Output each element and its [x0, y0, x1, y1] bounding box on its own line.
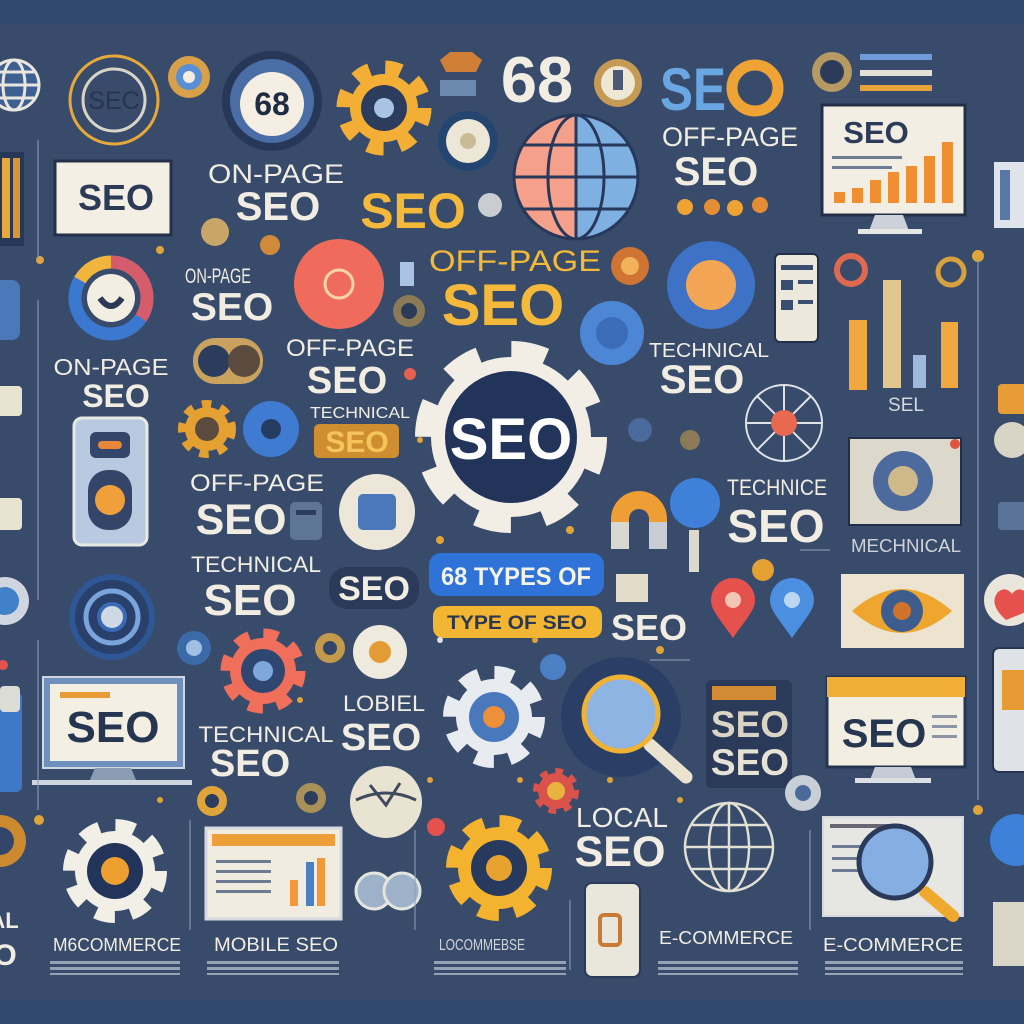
icon: blue orange disc — [667, 241, 755, 329]
panel: SEO SEO stacked — [706, 680, 792, 788]
left edge partial text — [0, 908, 19, 972]
icon: coral ring right — [837, 256, 964, 285]
panel: photo card right — [849, 438, 961, 525]
heading: Technical SEO far right — [727, 475, 827, 552]
panel: search browser — [823, 817, 963, 916]
heading: Lobiel SEO — [341, 691, 425, 759]
heading: Local SEO: LOCAL — [576, 802, 668, 833]
icon: blue hexagon — [243, 401, 299, 457]
icon: top browser ornament — [440, 52, 482, 96]
heading: Technical SEO right: SEO — [660, 358, 744, 402]
panel: browser chart — [206, 828, 341, 919]
icon: glasses — [356, 873, 420, 909]
label: M6commerce — [50, 935, 181, 975]
heading: Technical SEO far right: TECHNICE — [727, 475, 827, 500]
heading: Technical small — [310, 405, 410, 459]
right edge blue circle — [990, 814, 1024, 966]
heading: yellow SEO: SEO — [360, 183, 466, 239]
thin connector lines — [38, 140, 978, 970]
heading: Technical left: SEO — [204, 576, 296, 625]
heading: SEO top — [660, 56, 778, 123]
icon: small hydrant — [393, 262, 425, 327]
icon: red small gear — [538, 773, 574, 809]
icon: 68 dial: 68 — [254, 86, 290, 122]
heading: Off-page SEO large: SEO — [442, 273, 564, 338]
icon: wire globe bottom — [685, 803, 773, 891]
heading: Off-page SEO lower: SEO — [196, 496, 286, 544]
heading: 68: 68 — [501, 43, 573, 116]
monitor SEO right: SEO — [842, 712, 926, 756]
heading: On-page SEO left: SEO — [82, 378, 150, 414]
heading: Technical SEO right: TECHNICAL — [649, 340, 769, 362]
label: E-commerce 2 — [823, 935, 963, 975]
icon: globe center — [514, 115, 638, 239]
heading: Technical left — [191, 552, 321, 625]
label: SEO pill: SEO — [338, 570, 410, 608]
icon: coral sun — [294, 239, 384, 329]
monitor chart top right — [822, 105, 965, 234]
heading: Technical SEO far right: SEO — [727, 500, 825, 552]
monitor SEO right — [827, 677, 965, 783]
heading: Off-page SEO top — [662, 122, 798, 194]
central gear SEO — [427, 353, 595, 521]
heading: Off-page SEO mid left: OFF-PAGE — [286, 335, 414, 362]
central gear SEO: SEO — [450, 407, 572, 472]
icon: small dials row — [197, 766, 821, 838]
heading: Technical small: SEO — [325, 426, 389, 459]
monitor chart top right: SEO — [843, 115, 909, 150]
heading: Technical small: TECHNICAL — [310, 405, 410, 422]
heading: On-page SEO left: ON-PAGE — [54, 354, 168, 380]
bar chart right — [849, 280, 958, 416]
banner: 68 types of — [429, 553, 604, 596]
banner: 68 types of: 68 TYPES OF — [441, 563, 591, 591]
icon: orange small gear — [183, 405, 231, 453]
icon: lock badge — [594, 59, 642, 107]
right edge panel — [994, 162, 1024, 228]
label: E-commerce 1 — [658, 928, 798, 975]
icon: phone left — [74, 418, 147, 545]
panel: SEO SEO stacked: SEO — [711, 742, 789, 783]
label: L-commerse: LOCOMMEBSE — [439, 937, 525, 954]
icon: pair of toggles — [193, 338, 263, 384]
heading: Technical left: TECHNICAL — [191, 552, 321, 577]
label: SEO mini card — [611, 574, 687, 648]
heading: Technical SEO lower: TECHNICAL — [198, 722, 334, 747]
scattered dots — [0, 246, 984, 836]
icon: yellow gear bottom — [456, 825, 542, 911]
banner: types of SEO — [433, 606, 602, 638]
icon: orange badge — [611, 247, 649, 285]
heading: On-page SEO second: SEO — [191, 286, 273, 329]
list stripes — [860, 54, 932, 91]
icon: white gear — [452, 675, 536, 759]
SEO card left — [55, 161, 171, 235]
icon: target — [72, 577, 152, 657]
left edge tiles — [0, 280, 1024, 530]
icon: phone bottom — [585, 883, 640, 977]
icon: top right dial — [812, 52, 852, 92]
heading: On-page SEO second — [185, 265, 273, 329]
heading: Off-page SEO large: OFF-PAGE — [429, 245, 601, 278]
heading: Technical SEO right — [649, 340, 769, 402]
heading: Off-page SEO top: OFF-PAGE — [662, 122, 798, 152]
heading: Lobiel SEO: LOBIEL — [343, 691, 425, 716]
left edge gold ring — [0, 815, 26, 867]
heading: On-page SEO second: ON-PAGE — [185, 265, 251, 288]
icon: orange gear top — [346, 70, 422, 146]
icon: tri-color ring — [75, 262, 147, 334]
monitor SEO left — [32, 677, 192, 785]
icon: map pins — [711, 559, 814, 638]
icon: network node — [746, 385, 822, 461]
heading: Off-page SEO lower — [190, 470, 324, 544]
bar chart right: SEL — [888, 395, 924, 416]
heading: SEO top: SE — [660, 56, 726, 123]
banner: types of SEO: TYPE OF SEO — [447, 613, 587, 634]
heading: Technical SEO lower: SEO — [210, 743, 290, 785]
icon: phone top right — [775, 254, 818, 342]
label: Mobile SEO: MOBILE SEO — [214, 935, 338, 956]
heading: On-page SEO: ON-PAGE — [208, 159, 344, 189]
right edge phone — [993, 648, 1024, 772]
icon: round screen — [339, 474, 415, 550]
label: SEO mini card: SEO — [611, 607, 687, 648]
left edge bars — [0, 152, 24, 246]
heading: On-page SEO: SEO — [236, 185, 320, 229]
heading: Off-page SEO lower: OFF-PAGE — [190, 470, 324, 497]
heading: Off-page SEO large — [429, 245, 601, 338]
monitor SEO left: SEO — [67, 703, 159, 752]
SEO card left: SEO — [78, 177, 154, 218]
icon: orange column pair — [611, 491, 667, 549]
icon: eye card — [841, 574, 964, 648]
label: L-commerse — [434, 937, 566, 975]
icon: coral gear — [228, 636, 298, 706]
icon: round badge — [438, 111, 498, 171]
icon: server tag — [290, 502, 322, 540]
heading: Off-page SEO top: SEO — [674, 150, 758, 194]
small icons top row — [201, 193, 768, 255]
panel: SEO SEO stacked: SEO — [711, 704, 789, 745]
icon: blue button — [580, 301, 644, 365]
label: Mobile SEO — [207, 935, 339, 975]
icon: SEO ring — [70, 56, 158, 144]
icon: SEO ring: SEC — [88, 87, 140, 115]
heading: On-page SEO — [208, 159, 344, 229]
heading: Local SEO: SEO — [575, 828, 665, 876]
left edge phone — [0, 686, 22, 792]
icon: magnifier — [561, 657, 686, 777]
heading: On-page SEO left — [54, 354, 168, 414]
icon: pin with stem — [670, 478, 720, 572]
heading: Local SEO — [575, 802, 668, 876]
text: Mechanical: MECHNICAL — [851, 536, 961, 556]
icon: small badge — [168, 56, 210, 98]
heading: Off-page SEO mid left: SEO — [307, 360, 387, 402]
heading: Technical SEO lower — [198, 722, 334, 785]
small badges — [0, 574, 1024, 680]
label: E-commerce 2: E-COMMERCE — [823, 935, 963, 955]
icon: globe top left — [0, 60, 39, 110]
heading: Off-page SEO mid left — [286, 335, 414, 402]
heading: Lobiel SEO: SEO — [341, 717, 421, 759]
icon: white gear bottom left — [73, 829, 157, 913]
label: E-commerce 1: E-COMMERCE — [659, 928, 793, 948]
icon: 68 dial — [222, 51, 322, 151]
label: M6commerce: M6COMMERCE — [53, 935, 181, 955]
